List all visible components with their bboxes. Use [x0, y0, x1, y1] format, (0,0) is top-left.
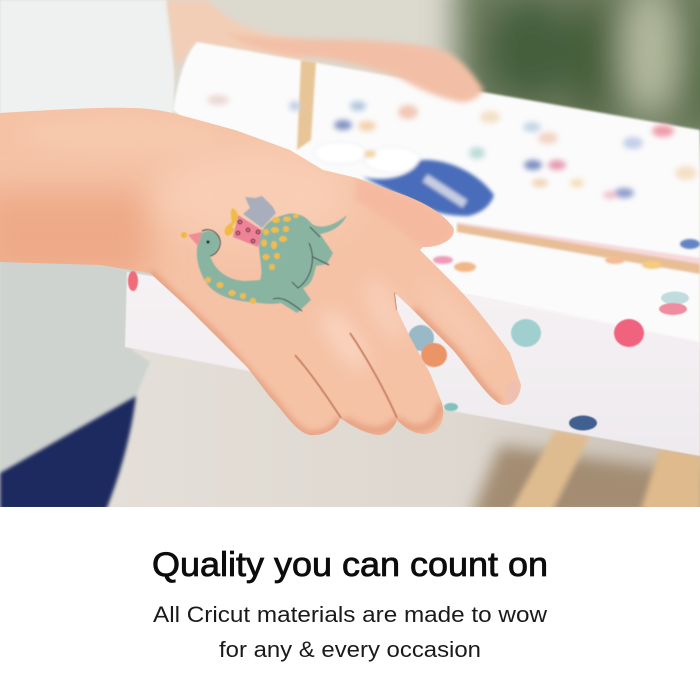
ribbon stripes — [297, 60, 700, 274]
back arm behind box — [167, 0, 305, 70]
caption panel — [0, 507, 700, 700]
pom — [181, 232, 187, 238]
pointer finger highlight — [414, 276, 496, 364]
eye — [206, 240, 210, 244]
polka dots on gift box — [128, 95, 700, 430]
ring knuckle highlight — [321, 310, 369, 370]
fingernail — [506, 381, 518, 403]
middle knuckle highlight — [367, 284, 403, 336]
finger lower shading — [150, 273, 500, 435]
yellow spots — [205, 214, 299, 304]
photo: hand with temporary tattoo holding a gift box — [0, 0, 700, 520]
t-shirt lower body — [0, 255, 155, 473]
fingers of far hand on top of box — [225, 32, 484, 102]
body line 1: All Cricut materials are made to wow — [153, 602, 547, 627]
arm shading — [0, 190, 150, 280]
blue cloud graphic on gift box — [362, 148, 496, 219]
hand-back highlight — [154, 150, 346, 240]
wooden table legs — [470, 445, 700, 520]
gift on dinosaur back — [225, 196, 276, 247]
party hat — [188, 232, 202, 246]
navy shorts — [0, 396, 136, 510]
dinosaur outline strokes — [202, 227, 329, 311]
dinosaur body — [197, 213, 347, 313]
gift box front side — [125, 272, 700, 456]
photo background — [0, 0, 700, 510]
arm highlight — [20, 113, 220, 157]
heading: Quality you can count on — [152, 546, 548, 584]
finger creases — [295, 293, 397, 418]
tattoo: dinosaur with party hat and gift — [181, 196, 347, 313]
body line 2: for any & every occasion — [219, 637, 481, 662]
thumb side — [355, 178, 454, 247]
background plant — [455, 0, 700, 150]
gift box top — [173, 42, 700, 342]
sleeve: white t-shirt — [0, 0, 174, 120]
hand and forearm — [0, 100, 530, 440]
